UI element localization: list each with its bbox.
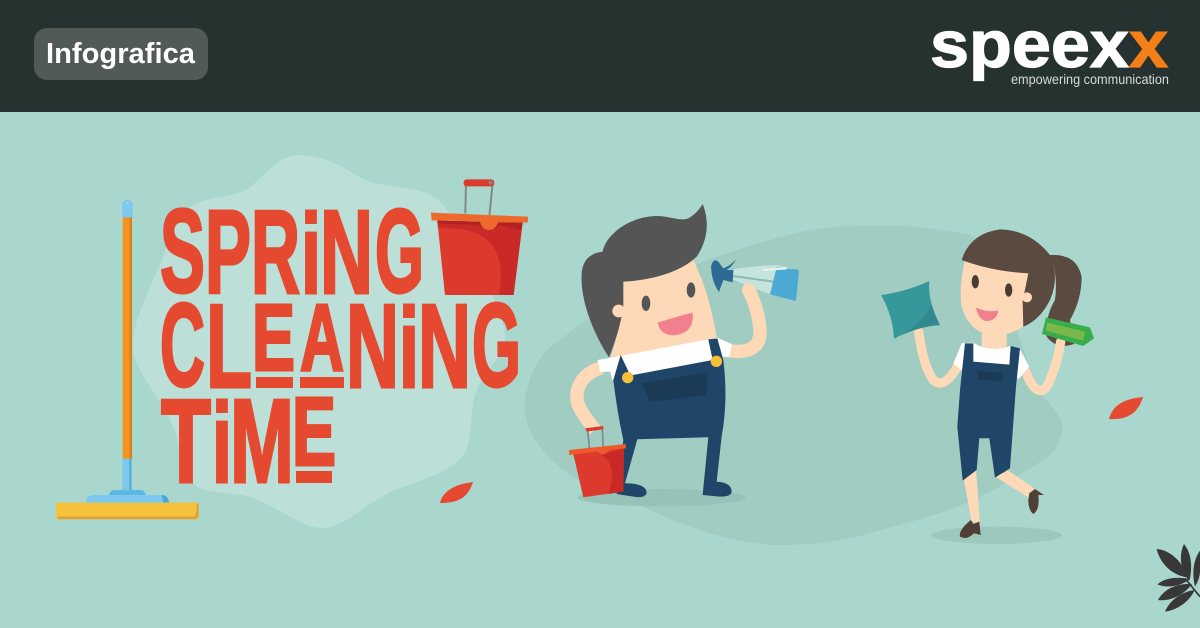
woman: eyes — [972, 275, 979, 288]
logo: speexx: empowering communication — [1011, 71, 1169, 87]
title line: CLEANiNG: E — [252, 285, 295, 391]
woman: pillow — [881, 281, 940, 339]
man: ground shadow — [578, 489, 746, 506]
man: ear — [612, 305, 625, 317]
title line: TiME: i — [212, 380, 232, 506]
title line: CLEANiNG: N — [418, 280, 471, 413]
man: raised arm — [728, 290, 760, 351]
light blob behind title — [133, 155, 505, 528]
title line: SPRiNG: R — [251, 186, 300, 319]
title line: CLEANiNG: N — [346, 280, 399, 413]
badge: Infografica — [34, 28, 208, 80]
title line: TiME — [161, 375, 336, 508]
title line: TiME: M — [230, 375, 294, 508]
woman: face — [961, 260, 1029, 336]
woman: overalls pocket — [977, 371, 1003, 382]
woman: ear — [1022, 292, 1032, 302]
title line: SPRiNG: P — [205, 186, 251, 319]
man: spray bottle — [711, 259, 799, 301]
woman: shoes — [960, 520, 981, 538]
woman: neck — [982, 333, 1007, 352]
header bar — [0, 0, 1200, 112]
woman: mouth — [976, 308, 998, 321]
man: small bucket — [569, 426, 626, 497]
title line: SPRiNG: N — [320, 186, 373, 319]
title line: CLEANiNG — [160, 279, 521, 413]
leaf: right red leaf — [1109, 397, 1143, 419]
man: shirt — [598, 338, 732, 381]
woman: overalls — [957, 343, 1020, 481]
dark blob behind characters — [525, 225, 1062, 545]
title line: CLEANiNG: C — [160, 279, 205, 412]
title line: CLEANiNG: i — [399, 285, 419, 411]
title line: SPRiNG: G — [375, 185, 424, 318]
badge: Infografica: Infografica — [46, 38, 196, 70]
man: hair — [582, 204, 707, 357]
woman: shirt — [953, 343, 1029, 379]
man: overalls — [613, 338, 732, 497]
title line: CLEANiNG: L — [206, 280, 252, 413]
icon: dark plant — [1157, 544, 1200, 612]
woman: arms — [919, 332, 957, 383]
man: overalls pocket — [642, 372, 707, 402]
woman: ponytail — [1046, 255, 1082, 346]
woman: ground shadow — [931, 527, 1062, 544]
man: buttons — [622, 372, 633, 383]
character: man with spray bottle and bucket — [569, 204, 799, 506]
woman: hair — [962, 229, 1055, 327]
man: mouth — [658, 313, 693, 335]
woman: green cloth — [1042, 317, 1094, 346]
man: lowered arm — [577, 368, 602, 430]
title line: TiME: T — [161, 375, 211, 508]
title: SPRiNG CLEANiNG TiME — [160, 185, 521, 508]
title line: SPRiNG: S — [160, 185, 205, 318]
man: head — [610, 260, 717, 359]
title line: SPRiNG — [160, 185, 424, 319]
icon: mop — [56, 200, 199, 519]
title line: CLEANiNG: G — [472, 279, 521, 412]
character: woman with pillow and cloth — [881, 229, 1094, 544]
logo: speexx: speexx — [930, 7, 1168, 81]
woman: legs — [963, 468, 980, 523]
icon: large red bucket — [431, 179, 528, 295]
title line: TiME: E — [292, 377, 336, 486]
title line: CLEANiNG: A — [300, 285, 344, 391]
man: eyes — [642, 296, 650, 311]
title line: SPRiNG: i — [301, 191, 321, 317]
leaf: left red leaf — [440, 482, 473, 503]
